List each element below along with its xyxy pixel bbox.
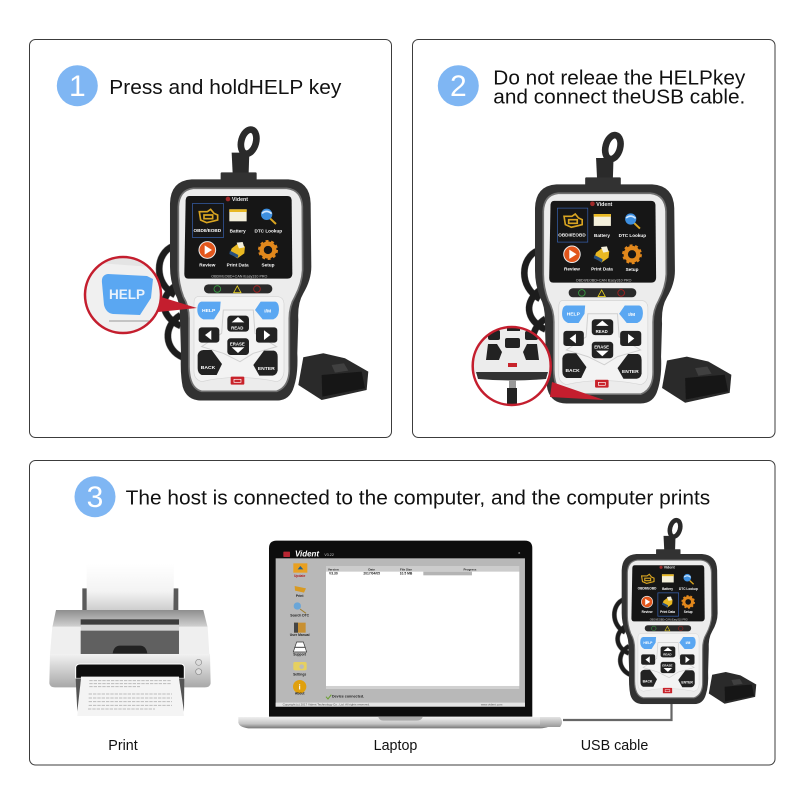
device body [170,179,311,401]
screen: OBDII/EOBD+CAN iEasy310 PRO [211,274,268,278]
icon: magnifier [683,574,694,584]
screen [184,196,292,279]
icon: review [641,596,653,608]
lanyard loop [656,519,682,556]
icon: battery [662,574,674,582]
screen: Setup [262,263,275,268]
device faceplate [627,560,712,698]
software table: 10.5 MB [400,572,413,576]
icon: step number 3 [74,476,116,517]
screen: OBDII/EOBD [638,587,657,591]
key: right [256,327,277,343]
key: BACK: BACK [565,368,580,374]
app window: V3.22 [324,553,334,557]
sidebar menu [290,563,310,696]
label: Laptop: Laptop [374,738,417,754]
screen: OBDII/EOBD+CAN iEasy310 PRO [576,278,632,282]
lanyard loop [585,133,623,187]
device faceplate [178,188,303,391]
laptop illustration [238,541,553,728]
screen: OBDII/EOBD+CAN iEasy310 PRO [650,618,688,621]
output slot [76,664,184,678]
icon: battery [594,214,611,226]
selected menu frame [193,203,223,238]
icon: engine [564,214,582,227]
keypad [638,634,699,693]
icon: printer [594,246,609,263]
status bar: Copyright (c) 2017 Vident Technology Co., Ltd. All rights reserved. [283,703,370,707]
screen: Setup [626,267,639,272]
icon: gear [623,245,641,263]
heading: step 3: The host is connected to the computer, and the computer prints [126,486,710,509]
icon: engine [199,209,218,223]
sidebar menu: User Manual [290,633,310,637]
OBD connector [298,353,368,400]
key: BACK: BACK [643,680,653,684]
status lights [645,625,691,631]
icon: step number 1 [57,65,98,106]
sidebar menu: About [295,692,305,696]
screen: Battery [594,233,610,238]
USB cable [540,702,672,727]
icon: gear [259,241,277,259]
software table: V3.30 [329,572,338,576]
screen [631,565,705,621]
key: right [680,654,695,665]
screen: Vident [596,202,613,208]
callout: HELP key magnified [85,257,197,340]
key: HELP: HELP [643,641,653,645]
heading: step 1: Press and holdHELP key [109,76,342,99]
key: READ: READ [231,325,243,330]
device: scan tool with HELP callout [159,128,368,401]
red button [231,377,244,385]
app window [276,549,525,707]
software table: 2017/04/05 [363,572,380,576]
panel: step 1 [30,40,392,438]
red button [595,380,609,388]
screen: Print Data [227,262,249,267]
icon: review [564,246,580,263]
key: ERASE: ERASE [594,345,609,350]
key: I/M: I/M [628,312,635,318]
status lights [569,288,636,297]
key: HELP: HELP [567,312,581,318]
key: ENTER: ENTER [258,366,275,372]
key: I/M: I/M [264,308,271,314]
device faceplate [543,193,666,394]
status lights [204,284,272,293]
connection status: Device connected. [332,695,364,699]
sidebar menu: Settings [293,672,306,676]
key: right [620,331,641,346]
icon: magnifier [261,209,276,224]
status bar: www.vident.com [481,703,503,707]
screen: Vident [664,566,675,570]
icon: gear [682,596,694,608]
status bar [276,703,525,707]
cable coil [614,599,630,675]
icon: review [199,242,216,258]
paper sheet [87,563,174,619]
icon: step number 2 [438,65,479,106]
OBD connector [709,672,756,704]
screen: DTC Lookup [619,233,646,238]
software table: Date [368,567,375,571]
device body [622,554,718,704]
selected menu frame [557,208,588,242]
key: HELP: HELP [202,308,216,314]
callout: HELP key magnified: HELP [109,287,145,302]
software table: Progress [463,567,477,571]
screen: OBDII/EOBD [193,228,222,233]
sidebar menu: Update [294,574,305,578]
icon: printer [662,596,673,608]
screen [549,201,656,283]
icon: magnifier [625,213,640,229]
keypad [559,300,648,388]
key: ERASE: ERASE [662,664,672,668]
screen: OBDII/EOBD [558,232,586,237]
sidebar menu: Search DTC [290,613,310,617]
sidebar menu: Print [296,594,304,598]
key: ERASE: ERASE [230,341,245,346]
app window: Vident [295,549,319,558]
cable coil [524,250,548,361]
app window: x [518,550,520,555]
icon: step number 2: 2 [450,70,467,103]
screen: Vident [232,197,248,203]
panel: step 2 [412,40,775,438]
label: USB cable: USB cable [581,738,648,754]
lanyard loop [221,128,259,182]
screen: DTC Lookup [679,587,698,591]
callout: USB port magnified [470,326,604,408]
key: ENTER: ENTER [622,369,639,375]
screen: Battery [230,228,246,233]
key: READ: READ [596,329,608,334]
OBD connector [662,357,731,403]
cable coil [159,246,183,357]
red button [663,688,672,693]
printed page [76,677,184,716]
screen: Review [642,610,653,614]
key: left [563,331,584,346]
panel: step 3 [30,460,775,765]
key: left [641,654,655,665]
device: scan tool [524,133,731,403]
screen: Print Data [591,266,613,271]
device: scan tool connected [614,519,756,704]
key: BACK: BACK [201,365,216,371]
selected menu frame [658,593,679,616]
key: I/M: I/M [686,641,690,645]
laptop base [238,717,553,728]
key: left [199,327,219,343]
heading: step 2 [493,66,746,108]
printer buttons [196,659,202,675]
printer illustration [49,563,211,716]
software table: Version [328,567,339,571]
icon: printer [229,242,245,258]
sidebar menu: Support [293,653,307,657]
screen: Review [564,266,580,271]
label: Print: Print [108,738,138,754]
screen: DTC Lookup [254,229,282,234]
keypad [194,297,284,385]
sidebar menu: i [299,682,301,691]
screen: Setup [684,610,693,614]
heading: step 2: and connect theUSB cable. [493,85,745,108]
screen: Print Data [660,610,675,614]
device body [535,184,675,403]
software table [326,566,519,689]
icon: step number 3: 3 [87,481,103,514]
icon: step number 1: 1 [69,70,86,103]
heading: step 2: Do not releae the HELPkey [493,66,746,89]
software table: File Size [400,567,412,571]
icon: engine [642,574,654,583]
screen: Review [199,262,216,267]
icon: battery [229,209,247,221]
key: ENTER: ENTER [681,680,693,684]
screen: Battery [662,587,673,591]
key: READ: READ [663,653,672,657]
